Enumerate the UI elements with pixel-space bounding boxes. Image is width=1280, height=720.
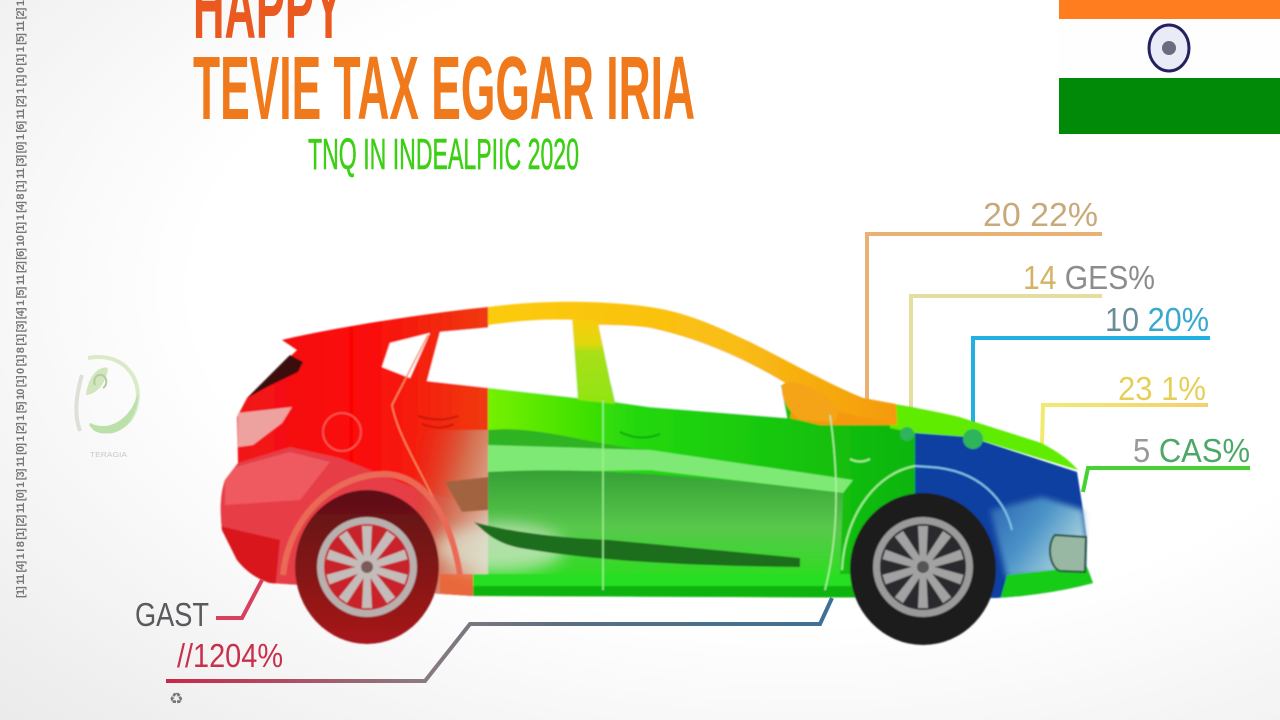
panel: orange cowl	[790, 370, 897, 425]
connector: CAS%	[1083, 468, 1250, 492]
label: 23 1%: 23 1%	[1118, 370, 1206, 407]
car	[215, 300, 1095, 645]
label: 5 CAS%: 5 CAS%	[1133, 432, 1250, 469]
panel: red rear	[215, 300, 488, 600]
connector: 10 20%	[973, 338, 1210, 435]
connector: 14 GES%	[911, 296, 1102, 410]
subtitle: TNQ IN INDEALPIIC 2020	[308, 130, 579, 179]
icon: chakra	[1149, 25, 1189, 71]
stripe: dark side skirt	[474, 522, 800, 567]
connector: 20 22%	[867, 234, 1102, 405]
front wheel arch	[915, 466, 1012, 530]
fuel cap	[323, 413, 361, 451]
window: rear quarter	[382, 333, 430, 378]
label: 10 20%: 10 20%	[1105, 301, 1209, 338]
connector lines	[166, 234, 1250, 681]
connector: 1204% underline	[166, 598, 832, 681]
labels	[135, 196, 1250, 708]
label: 1204%: //1204%	[177, 637, 283, 674]
hood joints	[900, 427, 983, 449]
icon: small recycle mark: ♻	[169, 689, 183, 708]
rear wheel arch	[283, 474, 460, 575]
headlamp	[1050, 535, 1086, 572]
connector: GAST	[216, 580, 262, 618]
panel: green middle	[435, 385, 1003, 600]
window: rear door	[427, 320, 578, 398]
panel: bright green hood	[888, 404, 1078, 471]
label: 14 GES%: 14 GES%	[1023, 259, 1155, 296]
door handles	[418, 416, 870, 462]
door lines	[392, 335, 836, 590]
front wheel	[850, 493, 996, 645]
label: GAST: GAST	[135, 596, 209, 633]
label: 20 22%: 20 22%	[983, 196, 1098, 233]
logo	[76, 357, 138, 459]
vertical side text: [1] 11 [4] 1 I 8 [1] [2] 11 [0] 1 [3] 11 [0] 1 [2] 1 [5] 10 [1] 0 [1] 8 [1] [3] [4] 1 [5] 11 [2] [6] 10 [1] 1 [4] 8 [1] 11 [3] [0] 1 [6] 11 [2] 1 [1] 0 [1] 1 [5] 11 [2] 1	[15, 0, 27, 598]
pillar between doors	[572, 318, 615, 404]
mirror	[782, 382, 840, 422]
rear window glass	[247, 355, 303, 398]
car body panels	[215, 300, 1095, 600]
title	[193, 0, 695, 139]
connector: 23 1%	[1042, 405, 1208, 445]
windows	[382, 320, 787, 418]
roof band yellow	[488, 302, 897, 424]
logo caption: TERAGIA	[90, 452, 127, 459]
icon: green swirl	[76, 357, 138, 433]
window: front door	[598, 325, 787, 418]
text: TEVIE TAX EGGAR IRIA	[193, 39, 695, 139]
rear wheel	[295, 490, 439, 644]
taillight	[238, 407, 292, 447]
flag of India	[1059, 0, 1280, 135]
soft pale glow	[435, 524, 565, 572]
panel: blue front	[915, 433, 1095, 600]
